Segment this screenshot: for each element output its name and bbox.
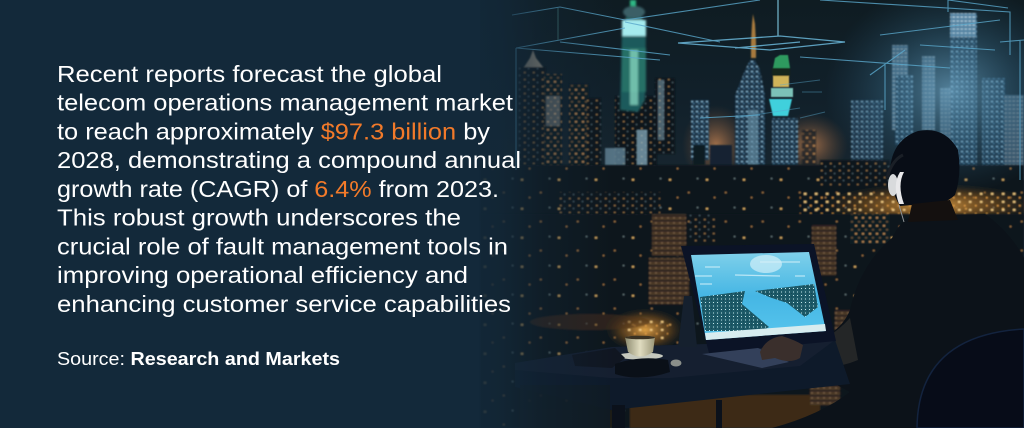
source line: Source: Research and Markets	[57, 349, 340, 369]
lower city	[480, 214, 1024, 428]
person: body	[772, 214, 1024, 428]
screen: glow	[750, 255, 782, 273]
city night scene	[480, 0, 1024, 428]
headphone-wearing person	[772, 130, 1024, 428]
skyline towers	[519, 13, 1024, 192]
paragraph text: 2028, demonstrating a compound annual	[57, 147, 521, 173]
screen: taskbar	[705, 324, 826, 340]
desk	[515, 340, 850, 428]
blue haze over right skyline	[825, 0, 1024, 195]
mid city lights	[480, 160, 1024, 227]
paragraph text: improving operational efficiency and	[57, 262, 468, 288]
laptop	[681, 244, 836, 368]
paragraph text: This robust growth underscores the	[57, 204, 461, 230]
screen: interface text marks	[695, 262, 805, 284]
person: head and hair	[890, 130, 959, 206]
coffee cup and saucer	[617, 336, 663, 360]
paragraph text: telecom operations management market	[57, 90, 514, 116]
screen: map right landmass	[755, 284, 818, 317]
laptop: screen	[691, 252, 826, 340]
paragraph text: to reach approximately $97.3 billion by	[57, 118, 490, 144]
monitor stand	[678, 296, 697, 347]
paragraph text	[57, 61, 521, 317]
laptop: keyboard	[702, 348, 789, 368]
screen: map left landmass	[700, 291, 769, 331]
paragraph text: growth rate (CAGR) of 6.4% from 2023.	[57, 176, 499, 202]
office chair	[917, 329, 1024, 428]
holographic wireframe lines	[512, 0, 1024, 180]
sky	[480, 0, 1024, 240]
paragraph text: enhancing customer service capabilities	[57, 291, 511, 317]
laptop: display housing	[681, 244, 836, 353]
person: sleeve folds	[800, 318, 858, 367]
neon tower	[769, 55, 793, 116]
icon: headphones	[887, 155, 904, 222]
hand on keyboard	[760, 336, 803, 361]
paragraph text: crucial role of fault management tools in	[57, 234, 508, 260]
person: neck	[908, 200, 958, 222]
green spire tower	[620, 0, 646, 112]
objects on desk	[572, 348, 682, 378]
paragraph text: Recent reports forecast the global	[57, 61, 442, 87]
